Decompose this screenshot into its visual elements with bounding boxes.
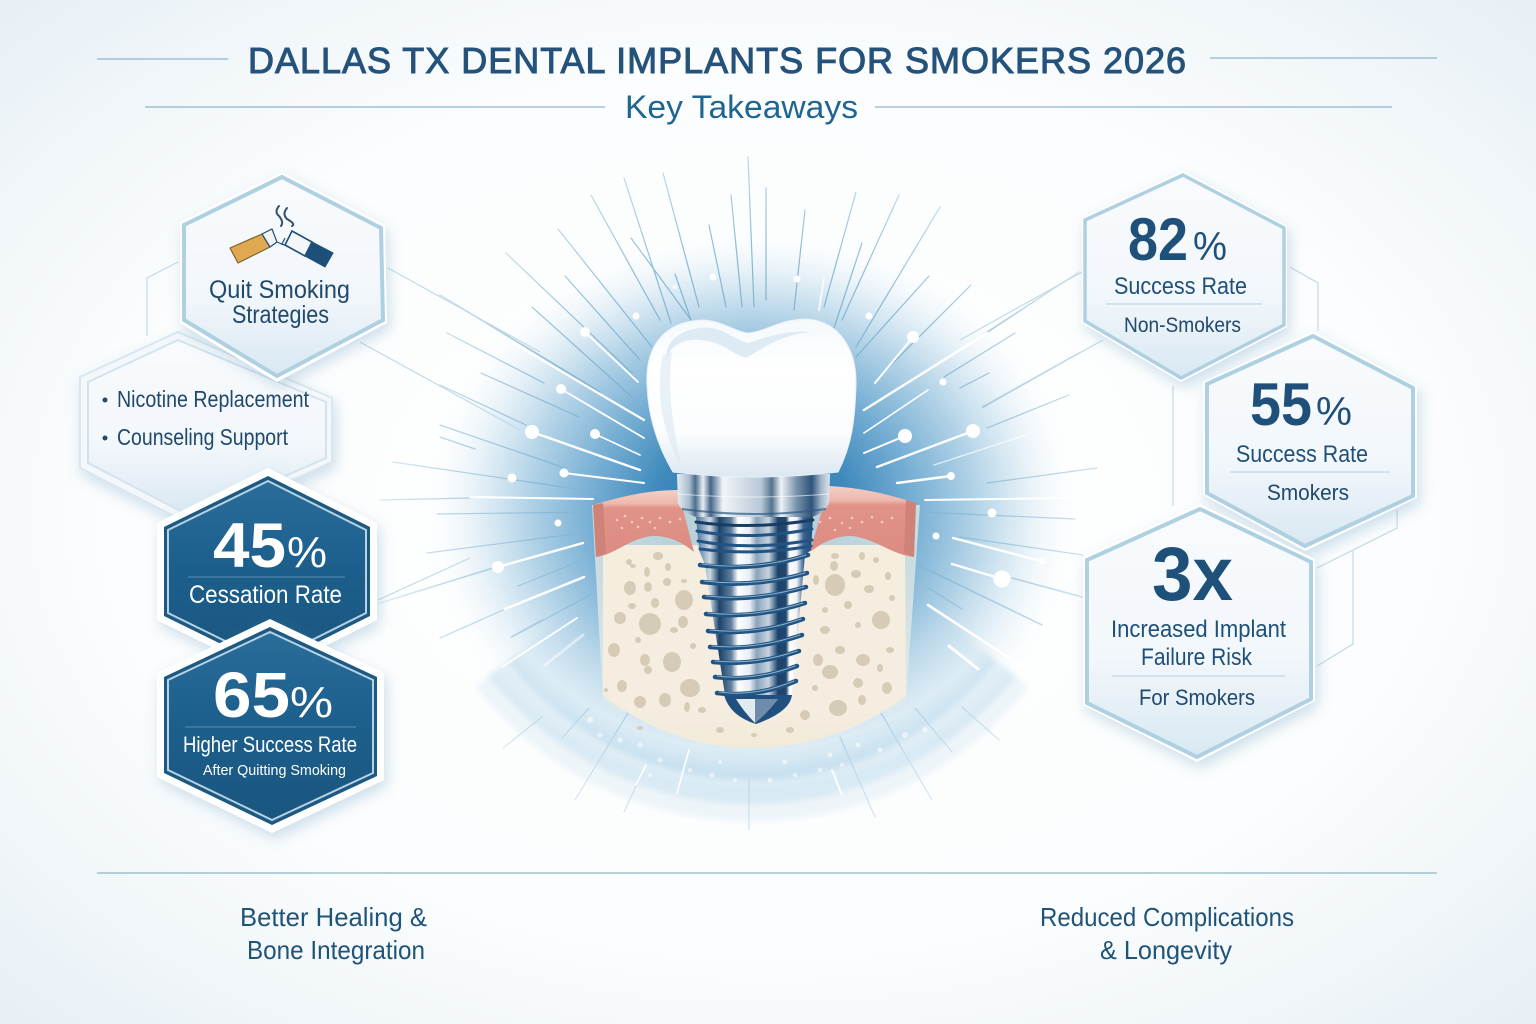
panel: 45% cessation rate bbox=[157, 468, 377, 675]
panel: 55% success rate smokers bbox=[1203, 331, 1417, 551]
stat bbox=[1106, 206, 1262, 337]
stat: Higher Success Rate bbox=[183, 732, 357, 757]
bullet list bbox=[102, 386, 310, 450]
panel: nicotine replacement and counseling bbox=[80, 332, 332, 525]
footer: better healing: Bone Integration bbox=[247, 935, 425, 965]
crown top groove bbox=[667, 328, 810, 360]
bone block bbox=[603, 545, 906, 748]
stat: Smokers bbox=[1267, 480, 1349, 505]
bone and gum cross-section bbox=[592, 486, 920, 748]
radiating rays bbox=[380, 157, 1097, 830]
stat: Cessation Rate bbox=[189, 581, 342, 609]
bullet list: Nicotine Replacement bbox=[117, 386, 310, 412]
stat: % bbox=[287, 528, 327, 577]
stat bbox=[1111, 532, 1286, 710]
icon: broken cigarette bbox=[230, 206, 333, 267]
screw neck and body bbox=[696, 516, 813, 695]
stat: Success Rate bbox=[1236, 441, 1368, 468]
stat: Non-Smokers bbox=[1124, 314, 1241, 337]
gum side faces bbox=[593, 500, 916, 557]
stat: Failure Risk bbox=[1141, 644, 1253, 671]
stat: Increased Implant bbox=[1111, 616, 1286, 643]
bullet list: Counseling Support bbox=[117, 424, 289, 450]
stat: 45 bbox=[213, 511, 286, 581]
stat: 65 bbox=[213, 659, 290, 731]
label: Quit Smoking bbox=[209, 276, 350, 304]
stat: After Quitting Smoking bbox=[203, 762, 346, 779]
title: DALLAS TX DENTAL IMPLANTS FOR SMOKERS 2026 bbox=[248, 40, 1186, 81]
gum tissue right bbox=[810, 486, 916, 557]
bone side bands bbox=[592, 505, 920, 712]
thread highlights bbox=[702, 555, 806, 693]
footer: better healing: Better Healing & bbox=[240, 902, 427, 932]
implant screw bbox=[696, 516, 813, 724]
footer: reduced complications bbox=[1040, 902, 1294, 965]
gum tissue left bbox=[593, 490, 694, 557]
label: Strategies bbox=[232, 301, 329, 329]
panel: 3x increased implant failure risk bbox=[1083, 504, 1315, 762]
footer: better healing bbox=[240, 902, 427, 965]
tooth crown bbox=[647, 319, 856, 477]
stat bbox=[183, 659, 357, 779]
panel: 65% higher success rate bbox=[157, 619, 384, 833]
stat: % bbox=[1316, 390, 1352, 434]
white light rays and sparkles bbox=[470, 274, 1070, 795]
connector lines bbox=[147, 262, 1397, 666]
threads bbox=[696, 520, 813, 694]
stat: 82 bbox=[1128, 206, 1188, 273]
screw tip bbox=[724, 695, 792, 724]
stat: % bbox=[1193, 225, 1227, 269]
stat: Success Rate bbox=[1114, 273, 1247, 300]
panel: quit smoking strategies bbox=[180, 172, 387, 382]
stat bbox=[188, 511, 345, 609]
abutment collar bbox=[677, 474, 830, 517]
panel: 82% success rate non-smokers bbox=[1082, 171, 1287, 382]
gum texture dots bbox=[616, 515, 893, 531]
stat bbox=[1230, 371, 1390, 505]
footer: reduced complications: & Longevity bbox=[1100, 935, 1232, 965]
stat: 55 bbox=[1250, 371, 1312, 438]
stat: 3x bbox=[1152, 532, 1233, 617]
crown left shine bbox=[660, 352, 682, 468]
label bbox=[209, 276, 350, 329]
stat: % bbox=[290, 678, 333, 727]
subtitle: Key Takeaways bbox=[625, 89, 858, 125]
stat: For Smokers bbox=[1139, 685, 1255, 710]
lower concentric bands bbox=[475, 470, 1029, 822]
footer: reduced complications: Reduced Complications bbox=[1040, 902, 1294, 932]
bone pores bbox=[604, 552, 895, 737]
central glow bbox=[427, 230, 1077, 790]
tip cone bbox=[736, 699, 778, 723]
